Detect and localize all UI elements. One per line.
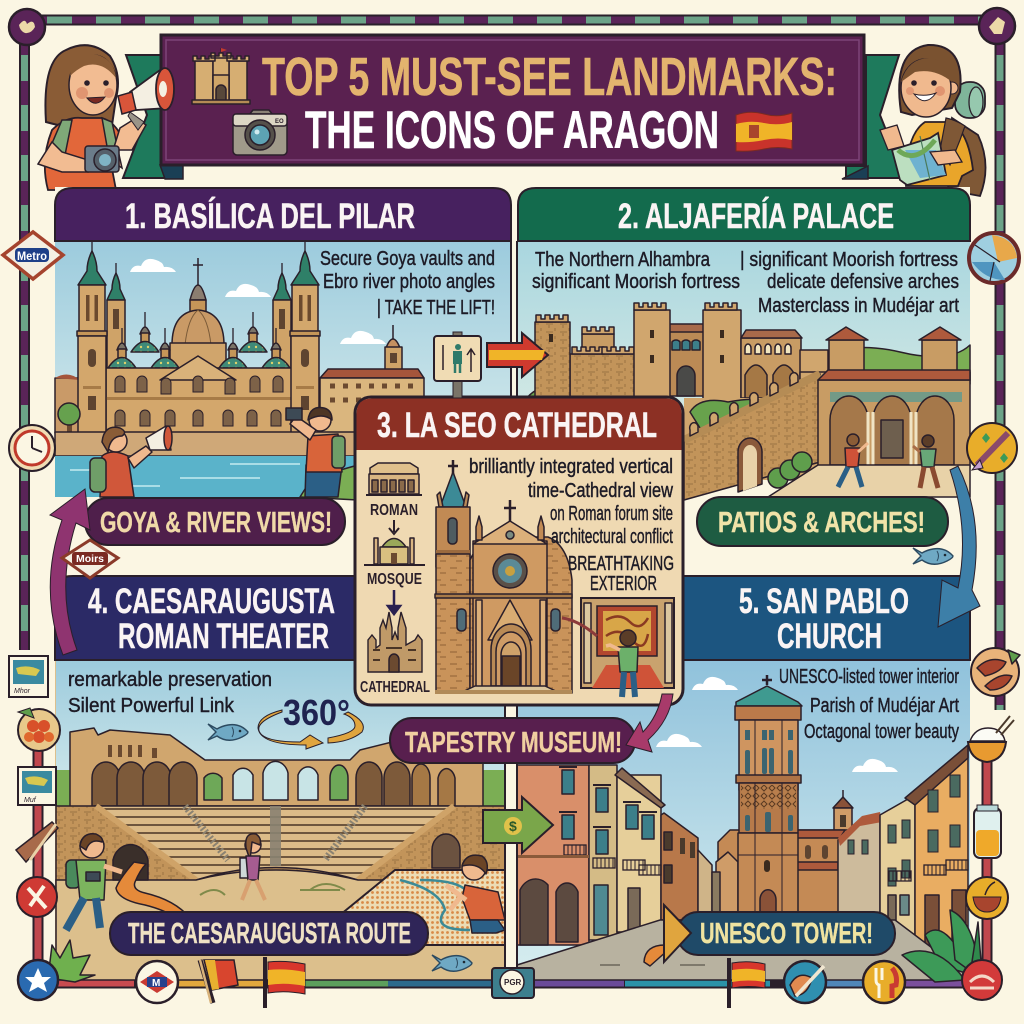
text: La Seo notes: BREATHTAKING <box>568 553 674 575</box>
person walking <box>240 834 265 900</box>
icon: fish <box>913 548 953 564</box>
divider between upper panels <box>511 241 517 400</box>
title banner <box>161 35 864 165</box>
icon: tomato bowl <box>18 708 60 751</box>
icon: metro sign small <box>62 540 118 578</box>
arches right <box>356 762 455 810</box>
theater scene <box>48 660 505 982</box>
icon: fish <box>432 955 472 971</box>
icon: 360 degree view <box>258 692 363 749</box>
octagonal tower <box>735 675 802 915</box>
text: La Seo notes: brilliantly integrated vertical <box>469 456 673 478</box>
callout: patios and arches: PATIOS & ARCHES! <box>718 507 925 539</box>
character: tour guide with megaphone <box>38 45 174 190</box>
text: Basilica notes: Ebro river photo angles <box>323 271 495 293</box>
character: traveller with map <box>880 45 986 196</box>
panel: Basilica del Pilar <box>55 187 511 575</box>
cathedral illustration <box>435 460 572 694</box>
text: Aljaferia notes: The Northern Alhambra <box>535 249 711 271</box>
text: San Pablo notes <box>779 666 959 743</box>
ribbon left <box>123 55 183 179</box>
icon: camera badge: PGR <box>504 978 522 987</box>
tapestry museum inset <box>562 598 674 697</box>
icon: fish <box>208 724 248 740</box>
icon: camera badge <box>492 968 534 998</box>
icon: metro sign left <box>3 232 63 279</box>
timeline: Roman to Mosque to Cathedral: ROMAN <box>370 502 418 519</box>
basilica scene <box>55 238 511 500</box>
icon: clock <box>9 425 55 471</box>
text: Aljaferia notes: delicate defensive arches <box>767 271 959 293</box>
castle back walls <box>535 303 970 406</box>
panel: San Pablo Church <box>517 575 982 982</box>
icon: metro badge: M <box>152 978 160 989</box>
header: Roman Theater: 4. CAESARAUGUSTA <box>88 582 335 621</box>
header: Basilica <box>55 188 511 241</box>
text: Aljaferia notes: | significant Moorish fortress <box>740 249 958 271</box>
person walking in green <box>913 435 938 488</box>
icon: spanish flag <box>736 112 792 151</box>
text: Basilica notes: Secure Goya vaults and <box>320 248 495 270</box>
text: La Seo notes <box>469 456 674 595</box>
icon: mosque <box>364 538 425 565</box>
callout: UNESCO tower <box>664 905 895 962</box>
text: La Seo notes: EXTERIOR <box>590 573 657 595</box>
icon: castle <box>192 48 250 104</box>
icon: paint brush <box>967 423 1017 473</box>
small tower right <box>385 325 402 373</box>
header: La Seo <box>356 398 682 450</box>
corner medallion: top left <box>9 9 45 45</box>
person with megaphone <box>90 426 172 497</box>
text: La Seo notes: on Roman forum site <box>550 503 673 525</box>
text: San Pablo notes: Octagonal tower beauty <box>804 721 959 743</box>
callout: Goya and river views: GOYA & RIVER VIEWS! <box>100 507 332 539</box>
timeline: Roman to Mosque to Cathedral <box>360 463 430 696</box>
text: San Pablo notes: Parish of Mudéjar Art <box>810 695 959 717</box>
header: Basilica: 1. BASÍLICA DEL PILAR <box>125 196 415 236</box>
header: San Pablo: CHURCH <box>777 617 882 656</box>
person kneeling at mosaic <box>446 855 505 933</box>
left houses <box>517 765 720 945</box>
tree <box>58 403 80 434</box>
header: La Seo: 3. LA SEO CATHEDRAL <box>377 406 657 445</box>
icon: camera: EO <box>275 119 284 125</box>
arrow: money: $ <box>509 818 517 834</box>
title line 2: THE ICONS OF ARAGON <box>305 101 719 160</box>
cavea seating <box>96 806 454 880</box>
river <box>55 456 355 497</box>
icon: megaphone <box>118 68 174 130</box>
icon: metro badge <box>136 961 178 1003</box>
icon: red food badge <box>962 960 1002 1000</box>
central dome <box>170 258 226 371</box>
header: Aljaferia: 2. ALJAFERÍA PALACE <box>618 196 894 236</box>
icon: metro sign small: Moirs <box>76 554 104 565</box>
icon: map stamp two <box>18 767 56 805</box>
callout: patios and arches <box>697 497 948 546</box>
icon: flag three <box>729 958 765 1008</box>
person photographing <box>286 408 345 497</box>
callout: UNESCO tower: UNESCO TOWER! <box>700 918 873 950</box>
header: Roman Theater: ROMAN THEATER <box>118 617 329 656</box>
callout: tapestry museum <box>390 718 635 763</box>
timeline: Roman to Mosque to Cathedral: CATHEDRAL <box>360 679 430 696</box>
timeline: Roman to Mosque to Cathedral: MOSQUE <box>367 571 422 588</box>
callout: route: THE CAESARAUGUSTA ROUTE <box>128 918 411 950</box>
icon: cutlery badge <box>863 961 905 1003</box>
route path <box>116 862 190 918</box>
tunnels <box>113 845 148 880</box>
icon: lift sign <box>434 332 481 398</box>
red-roofed building <box>320 369 424 435</box>
header: San Pablo <box>517 576 970 660</box>
ribbon right <box>842 55 905 179</box>
icon: pencils <box>16 822 58 862</box>
corner medallion: top right <box>979 8 1015 44</box>
icon: handheld camera <box>85 146 119 172</box>
arrow: palace to San Pablo <box>938 466 980 627</box>
panel: Aljaferia Palace <box>517 187 970 575</box>
icon: roman temple <box>366 463 422 495</box>
icon: folded map <box>892 133 946 185</box>
icon: brush palette badge <box>784 961 826 1003</box>
arrow: money <box>483 797 553 853</box>
icon: plate of meat <box>971 648 1020 696</box>
icon: camera <box>233 110 287 155</box>
callout: Goya and river views <box>85 498 345 545</box>
icon: juice jar <box>974 805 1001 858</box>
church and street scene <box>517 675 982 982</box>
mosaic <box>340 870 505 945</box>
street <box>517 920 968 980</box>
text: Basilica notes: | TAKE THE LIFT! <box>377 297 495 319</box>
text: La Seo notes: time-Cathedral view <box>528 480 673 502</box>
header: Roman Theater <box>55 576 355 660</box>
icon: flag two <box>265 957 305 1008</box>
text: La Seo notes: architectural conflict <box>551 526 673 548</box>
panel: Caesaraugusta Roman Theater <box>48 575 506 982</box>
text: Theater notes: remarkable preservation <box>68 669 272 691</box>
arches centre <box>204 761 348 800</box>
right houses <box>838 745 968 960</box>
callout: route <box>110 912 428 955</box>
text: Aljaferia notes: Masterclass in Mudéjar art <box>758 295 959 317</box>
courtyard wall <box>684 398 830 480</box>
icon: map stamp two: Muf <box>24 797 37 804</box>
icon: map stamp one <box>9 656 48 697</box>
header: Aljaferia <box>518 188 970 241</box>
small belfry <box>833 790 853 840</box>
icon: stew bowl <box>966 877 1008 919</box>
icon: stained compass <box>969 233 1019 283</box>
text: Theater notes: Silent Powerful Link <box>68 695 235 717</box>
leaves plant <box>902 910 982 982</box>
icon: 360 degree view: 360° <box>283 692 350 733</box>
icon: rice bowl <box>968 716 1014 762</box>
person with camera <box>66 834 122 930</box>
icon: small cathedral <box>368 612 422 672</box>
text: Aljaferia notes <box>532 249 959 317</box>
text: Basilica notes <box>320 248 495 319</box>
bush <box>768 452 812 488</box>
panel: La Seo Cathedral <box>355 397 683 705</box>
icon: backpack <box>948 82 986 196</box>
icon: map stamp one: Mhor <box>14 688 31 695</box>
header: San Pablo: 5. SAN PABLO <box>739 582 909 621</box>
arrow: theater to basilica <box>50 489 90 655</box>
person walking in red <box>838 434 868 487</box>
vertical gap between panels <box>505 705 517 980</box>
plant <box>48 940 95 982</box>
arrow: Spanish flag <box>487 333 548 377</box>
church wings <box>716 830 850 915</box>
callout: tapestry museum: TAPESTRY MUSEUM! <box>405 727 622 759</box>
text: Theater notes <box>68 669 272 717</box>
arcade building <box>818 370 970 467</box>
icon: tools badge <box>17 877 57 917</box>
arrow: La Seo to tapestry <box>626 694 673 752</box>
icon: metro sign left: Metro <box>17 249 47 263</box>
text: Aljaferia notes: significant Moorish fortress <box>532 271 740 293</box>
arches left <box>92 762 197 810</box>
palace scene <box>518 241 970 500</box>
icon: flag one <box>200 960 238 1003</box>
icon: star badge <box>18 960 58 1000</box>
person viewing tapestry <box>606 630 638 697</box>
